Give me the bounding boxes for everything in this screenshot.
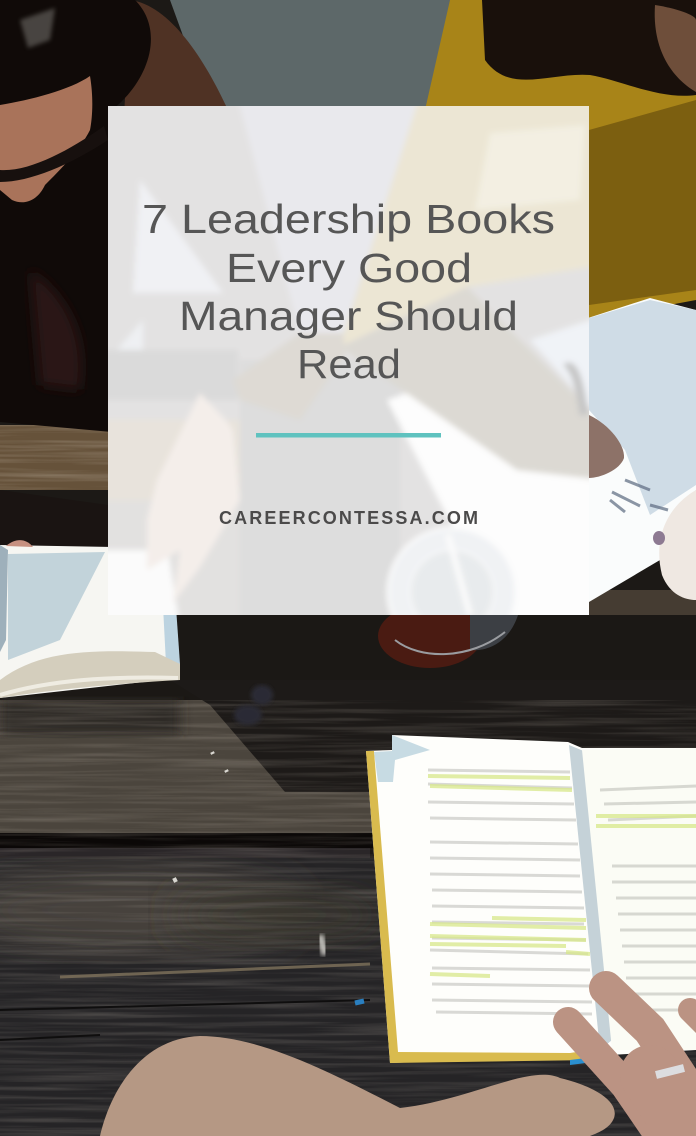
title: Every Good <box>226 245 472 291</box>
person: right woman in yellow top <box>425 0 696 320</box>
highlighter marks <box>428 776 696 976</box>
title: Manager Should <box>179 293 518 339</box>
title <box>142 196 555 387</box>
reader's hand with ring <box>568 988 696 1136</box>
title: Read <box>297 341 401 387</box>
printed text lines <box>428 770 696 1014</box>
teal divider <box>256 433 441 438</box>
concrete ground <box>170 0 470 110</box>
translucent title panel with photo showing through <box>108 106 589 615</box>
website address: CAREERCONTESSA.COM <box>219 508 478 528</box>
title: 7 Leadership Books <box>142 196 555 242</box>
forearm in foreground <box>100 1036 615 1136</box>
open book on left <box>0 540 180 698</box>
plastic drink cup below panel <box>378 604 518 668</box>
person: left woman with dark hair <box>0 0 260 432</box>
title text and branding <box>142 196 555 528</box>
open book with highlighted text <box>366 735 696 1065</box>
notebook with handwriting and pen <box>560 298 696 610</box>
